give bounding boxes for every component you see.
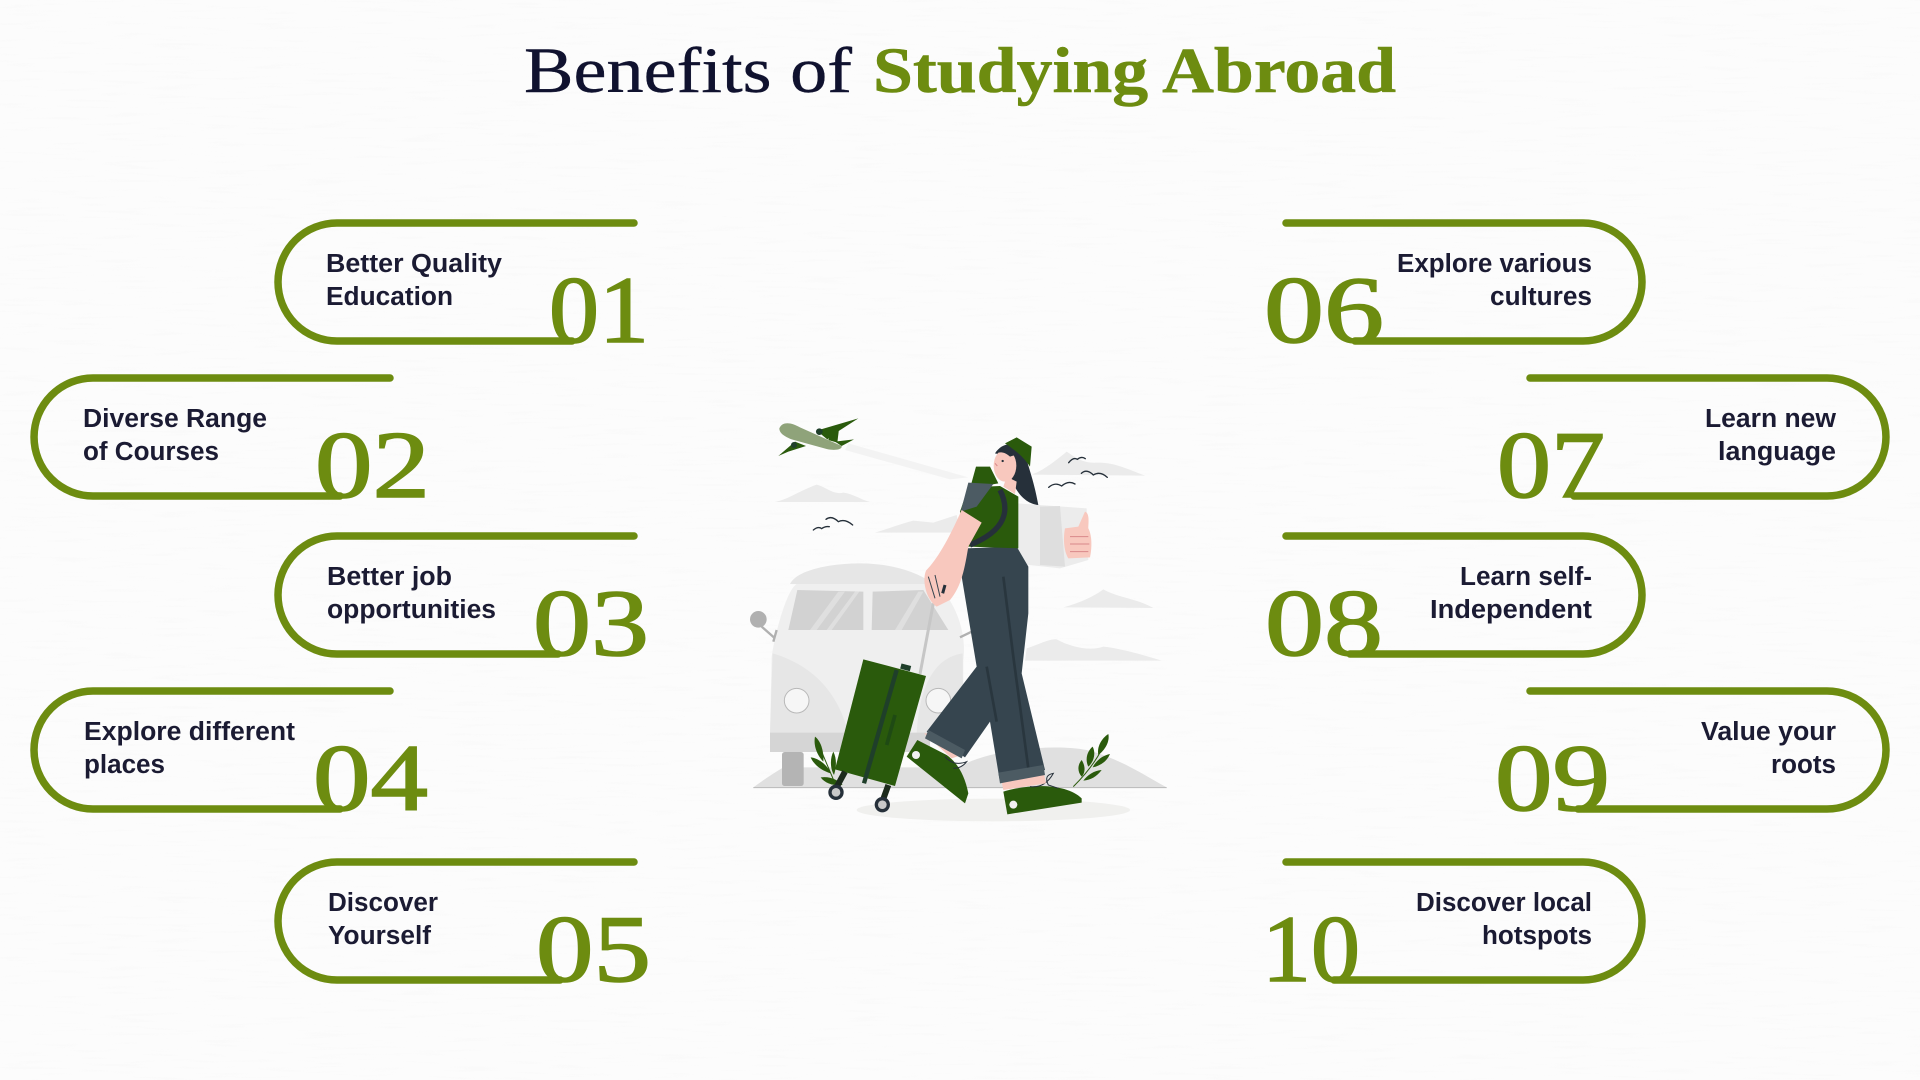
panel: benefit 10: Discover local	[1416, 889, 1592, 917]
panel: benefit 05: 05	[536, 896, 651, 1002]
panel: benefit 05: Discover	[328, 889, 438, 917]
panel: benefit 04: 04	[313, 725, 428, 831]
backpack	[970, 467, 998, 488]
panel: benefit 09	[1495, 691, 1886, 831]
title: Benefits of	[524, 35, 852, 107]
title	[524, 35, 1396, 107]
panel: benefit 09: Value your	[1701, 718, 1836, 746]
panel: benefit 02: Diverse Range	[83, 405, 267, 433]
neck and face	[1003, 477, 1017, 494]
panel: benefit 08: Learn self-	[1460, 563, 1592, 591]
panel: benefit 08: 08	[1265, 570, 1383, 676]
panel: benefit 03: Better job	[327, 563, 452, 591]
birds	[813, 457, 1107, 530]
panel: benefit 09: roots	[1771, 751, 1836, 779]
plant right	[1073, 734, 1110, 787]
hat	[1005, 437, 1032, 467]
panel: benefit 10	[1262, 862, 1642, 1002]
ground hill	[753, 747, 1167, 787]
panel: benefit 01: 01	[549, 257, 649, 363]
plane	[778, 418, 858, 456]
shirt	[960, 486, 1018, 548]
panel: benefit 08: Independent	[1430, 596, 1593, 624]
illustration: traveller with suitcase, van and plane	[750, 418, 1167, 821]
panel: benefit 06: 06	[1264, 257, 1384, 363]
panel: benefit 04: Explore different	[84, 718, 296, 746]
panel: benefit 07: Learn new	[1705, 405, 1836, 433]
panel: benefit 02: 02	[315, 412, 430, 518]
panel: benefit 05	[278, 862, 651, 1002]
hair	[995, 444, 1038, 505]
panel: benefit 02	[34, 378, 430, 518]
panel: benefit 03: opportunities	[327, 596, 496, 624]
panel: benefit 01	[278, 223, 649, 363]
panel: benefit 08	[1265, 536, 1642, 676]
plane trail	[845, 443, 968, 479]
panel: benefit 06: Explore various	[1397, 250, 1592, 278]
van	[750, 563, 972, 786]
arm and hand	[924, 510, 982, 607]
back shoe	[907, 740, 968, 803]
hand with thumb up	[1064, 512, 1091, 558]
front shoe	[1003, 786, 1082, 814]
trousers	[927, 547, 1045, 778]
panel: benefit 01: Better Quality	[326, 250, 503, 278]
panel: benefit 07: 07	[1497, 412, 1605, 518]
panel: benefit 06	[1264, 223, 1642, 363]
panel: benefit 03	[278, 536, 649, 676]
floor shadow	[857, 799, 1130, 821]
panel: benefit 09: 09	[1495, 725, 1610, 831]
panel: benefit 04	[34, 691, 428, 831]
panel: benefit 07	[1497, 378, 1886, 518]
plant left	[811, 737, 843, 785]
traveller	[907, 437, 1091, 814]
panel: benefit 07: language	[1718, 438, 1836, 466]
panel: benefit 05: Yourself	[328, 922, 432, 950]
panel: benefit 04: places	[84, 751, 165, 779]
map	[1015, 503, 1088, 568]
panel: benefit 03: 03	[533, 570, 649, 676]
suitcase	[828, 603, 933, 812]
ground line	[753, 786, 1167, 789]
clouds	[775, 452, 1162, 661]
panel: benefit 06: cultures	[1490, 283, 1592, 311]
panel: benefit 10: hotspots	[1482, 922, 1592, 950]
panel: benefit 01: Education	[326, 283, 453, 311]
title: Studying Abroad	[873, 35, 1396, 107]
panel: benefit 02: of Courses	[83, 438, 219, 466]
panel: benefit 10: 10	[1262, 896, 1360, 1002]
